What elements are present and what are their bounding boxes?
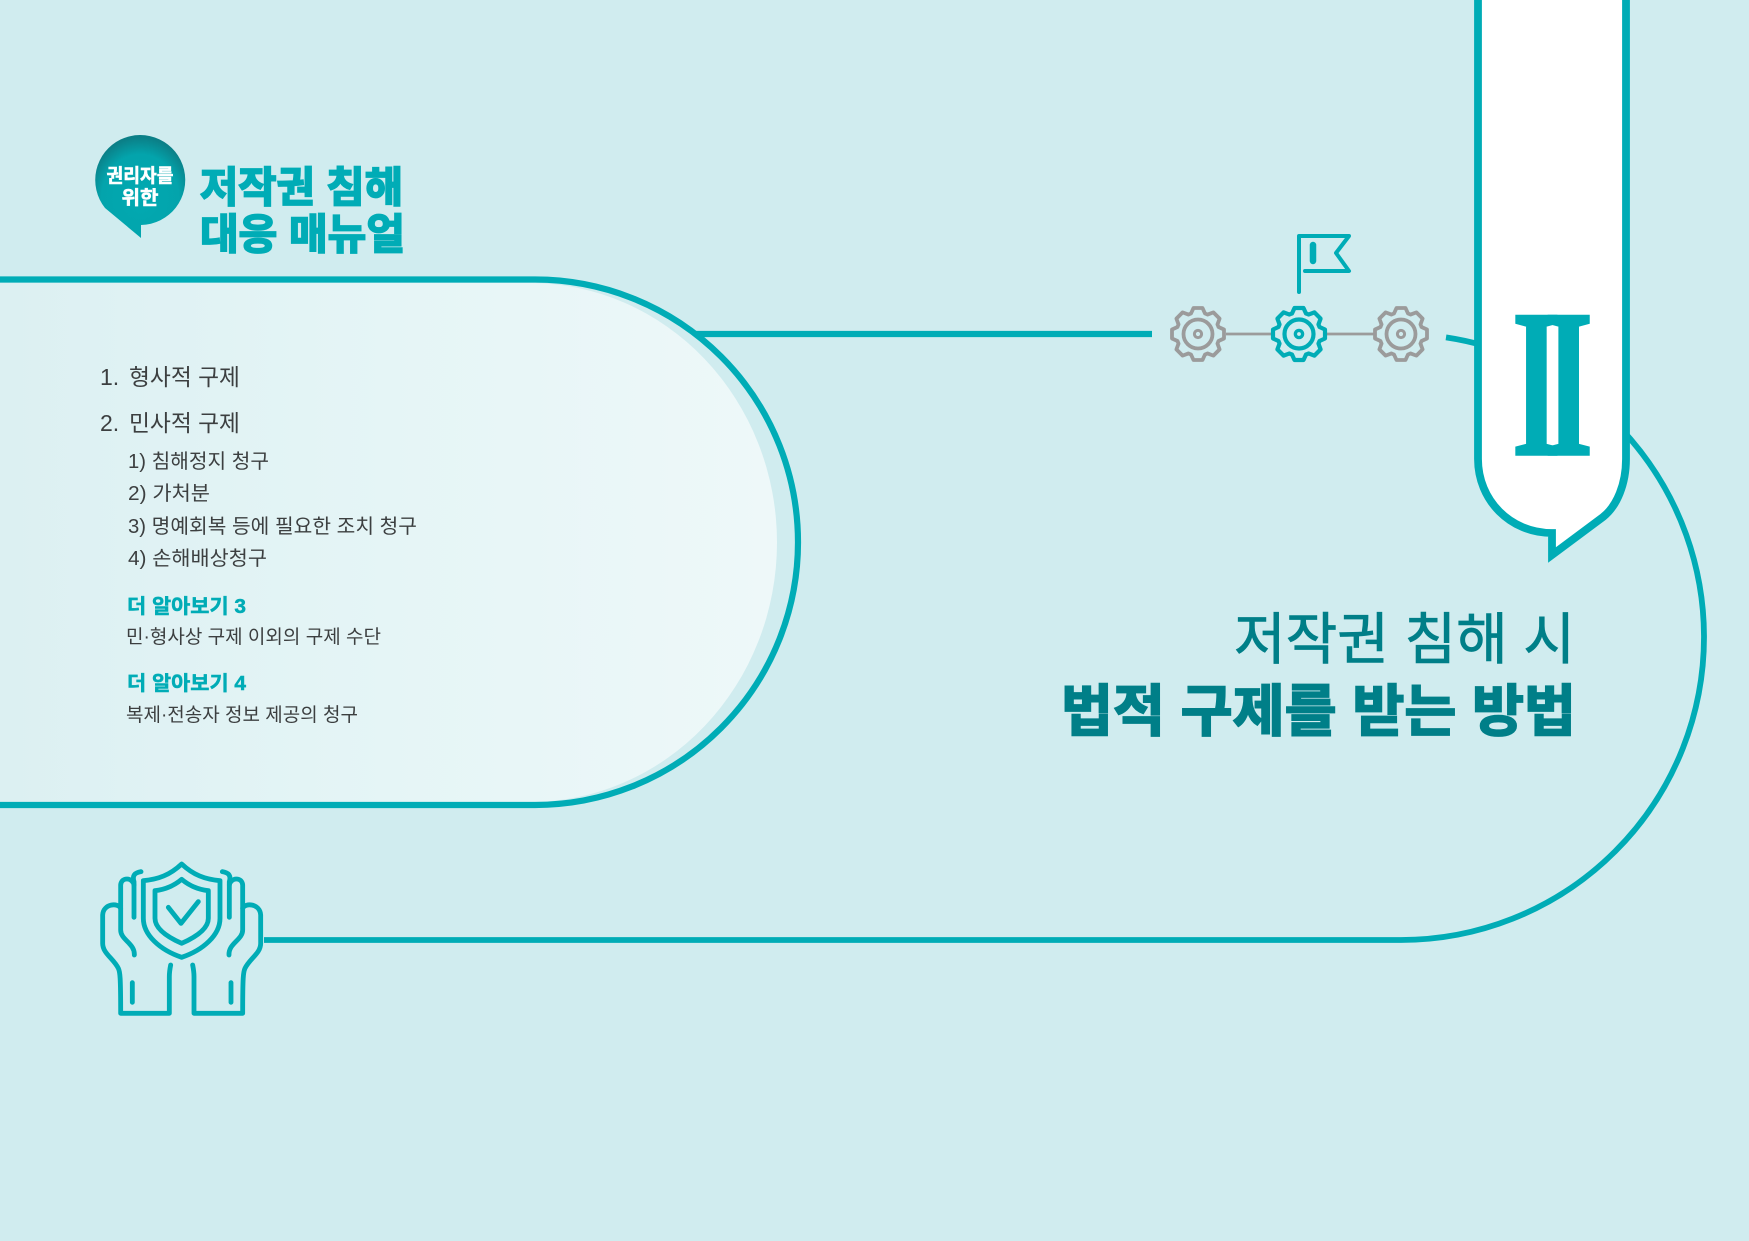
sub-item 1: 1) 침해정지 청구 <box>128 450 269 473</box>
chapter title line 1: 저작권 침해 시 <box>1234 608 1575 671</box>
logo: speech bubble badge <box>95 135 185 238</box>
manual title line 1: 저작권 침해 <box>200 164 403 211</box>
gear connector lines <box>1226 333 1374 335</box>
panel: contents list <box>0 280 798 805</box>
shield outer <box>143 864 220 957</box>
panel outline <box>0 280 798 805</box>
item 2 label: 민사적 구제 <box>129 410 240 436</box>
ribbon bookmark <box>1478 0 1626 555</box>
sub-item 3: 3) 명예회복 등에 필요한 조치 청구 <box>128 515 417 538</box>
sub-item 2: 2) 가처분 <box>128 482 210 505</box>
bubble shape <box>95 135 185 238</box>
bubble text line 2: 위한 <box>122 187 158 209</box>
item 1 label: 형사적 구제 <box>129 364 240 390</box>
icon: left gear <box>1172 308 1224 360</box>
learn more 3 text: 민·형사상 구제 이외의 구제 수단 <box>126 626 381 648</box>
left hand <box>103 872 171 1013</box>
manual title <box>200 164 405 258</box>
learn more 3 heading: 더 알아보기 3 <box>127 595 246 618</box>
icon: right gear <box>1375 308 1427 360</box>
shield inner <box>155 879 208 943</box>
connector line: panel to gears <box>696 331 1152 337</box>
contents list text <box>100 364 417 726</box>
chapter title line 2: 법적 구제를 받는 방법 <box>1061 680 1576 743</box>
connector line: large arc to hands icon <box>264 337 1704 940</box>
item 2: 2. <box>100 410 119 436</box>
icon: centre gear <box>1273 308 1325 360</box>
icon: flag <box>1299 236 1349 292</box>
sub-item 4: 4) 손해배상청구 <box>128 547 267 570</box>
panel fill <box>0 283 777 802</box>
chapter numeral: II <box>1512 265 1590 501</box>
right hand <box>193 872 261 1013</box>
learn more 4 heading: 더 알아보기 4 <box>127 672 247 695</box>
manual title line 2: 대응 매뉴얼 <box>200 211 405 258</box>
check mark <box>168 902 198 923</box>
icon: hands holding shield <box>103 864 261 1013</box>
chapter title <box>1061 608 1576 743</box>
learn more 4 text: 복제·전송자 정보 제공의 청구 <box>126 704 358 726</box>
bubble text line 1: 권리자를 <box>106 165 174 187</box>
item 1: 1. <box>100 364 119 390</box>
gear chain <box>1172 308 1427 360</box>
